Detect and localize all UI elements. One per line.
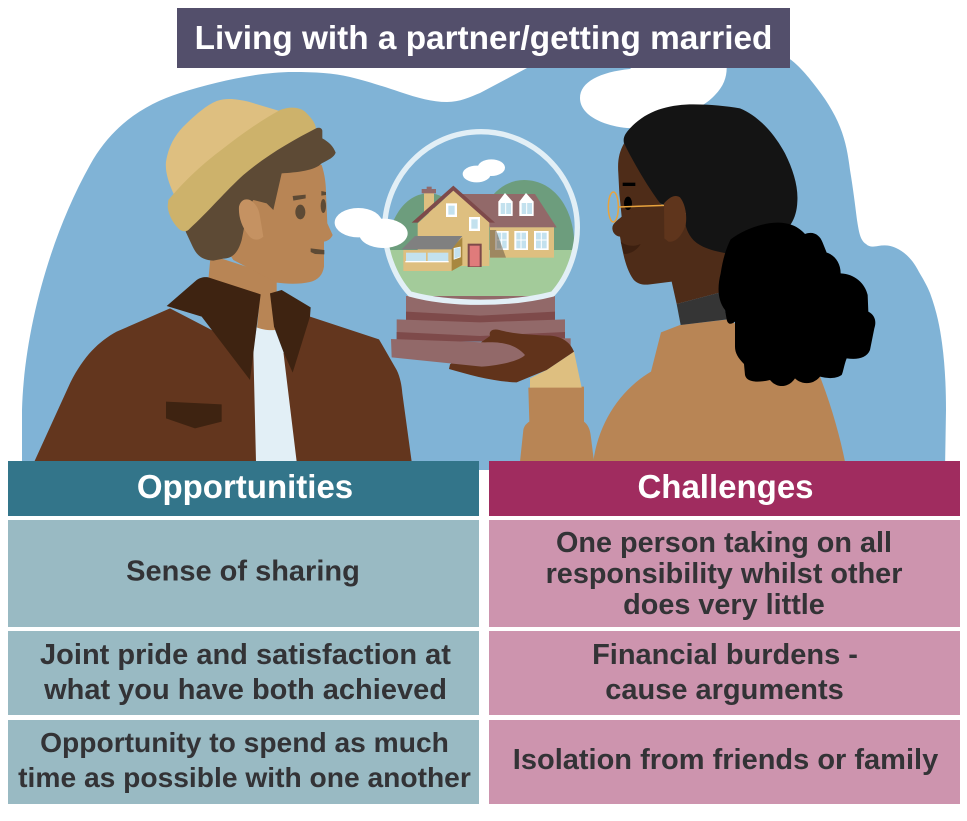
challenge: unequal responsibility: responsibility whilst other <box>546 558 902 590</box>
woman's face and neck <box>612 143 737 304</box>
globe glass <box>385 132 577 302</box>
challenge: isolation <box>489 720 960 804</box>
challenges heading <box>489 461 960 516</box>
house porch <box>402 236 462 271</box>
house wing <box>460 193 557 258</box>
globe hills <box>387 180 574 252</box>
man's jacket pocket <box>166 402 222 428</box>
glasses <box>608 192 664 222</box>
man's shirt <box>253 327 297 462</box>
challenges heading: Challenges <box>637 468 814 505</box>
opportunity: sense of sharing: Sense of sharing <box>126 556 360 588</box>
turtleneck <box>677 292 727 325</box>
opportunity: time together <box>8 720 479 804</box>
opportunity: joint pride: what you have both achieved <box>43 674 447 706</box>
opportunity: time together: time as possible with one another <box>18 761 471 793</box>
opportunity: joint pride <box>8 631 479 715</box>
title <box>177 8 790 68</box>
woman's smile <box>621 242 641 254</box>
challenge: unequal responsibility: does very little <box>623 589 825 621</box>
chimney <box>422 187 436 213</box>
hand holding the globe <box>449 329 574 382</box>
challenge: financial burdens: Financial burdens - <box>592 639 858 671</box>
globe grass <box>387 250 574 301</box>
opportunity: sense of sharing <box>8 520 479 627</box>
background blob <box>22 50 946 470</box>
woman's hair <box>624 104 797 255</box>
opportunity: joint pride: Joint pride and satisfaction at <box>40 639 451 671</box>
title: Living with a partner/getting married <box>195 20 772 57</box>
woman's eye and brow <box>623 183 635 210</box>
man's jacket <box>34 308 412 462</box>
woman's hair bun <box>719 223 875 386</box>
base bottom tier <box>391 339 525 367</box>
man's hair <box>186 128 336 261</box>
speech cloud <box>335 208 408 248</box>
challenge: financial burdens <box>489 631 960 715</box>
man's mouth <box>311 248 324 254</box>
house front gable <box>412 186 495 267</box>
man's face <box>217 153 333 284</box>
opportunity: time together: Opportunity to spend as much <box>40 726 449 758</box>
woman's body and jumper <box>593 319 845 462</box>
man's neck <box>208 255 277 332</box>
cuff <box>530 352 582 388</box>
white cloud top right <box>580 60 727 128</box>
man's ear <box>239 199 263 240</box>
illustration: couple holding a snow globe <box>22 50 946 470</box>
opportunities heading: Opportunities <box>137 468 353 505</box>
challenge: unequal responsibility: One person taking on all <box>556 527 892 559</box>
man's hat <box>166 99 282 210</box>
panel: challenges <box>489 461 960 804</box>
snow globe <box>385 132 582 388</box>
woman's ear <box>664 196 686 242</box>
opportunities heading <box>8 461 479 516</box>
panel: opportunities <box>8 461 479 804</box>
globe cloud <box>463 159 505 182</box>
woman's sleeve <box>520 387 594 462</box>
man's eyes and brows <box>293 191 326 219</box>
man's hat band <box>168 108 316 231</box>
snow globe base <box>397 296 571 352</box>
challenge: isolation: Isolation from friends or family <box>513 744 938 776</box>
challenge: financial burdens: cause arguments <box>605 674 844 706</box>
man <box>34 99 412 462</box>
challenge: unequal responsibility <box>489 520 960 627</box>
man's collar <box>167 277 311 380</box>
woman <box>520 104 875 462</box>
